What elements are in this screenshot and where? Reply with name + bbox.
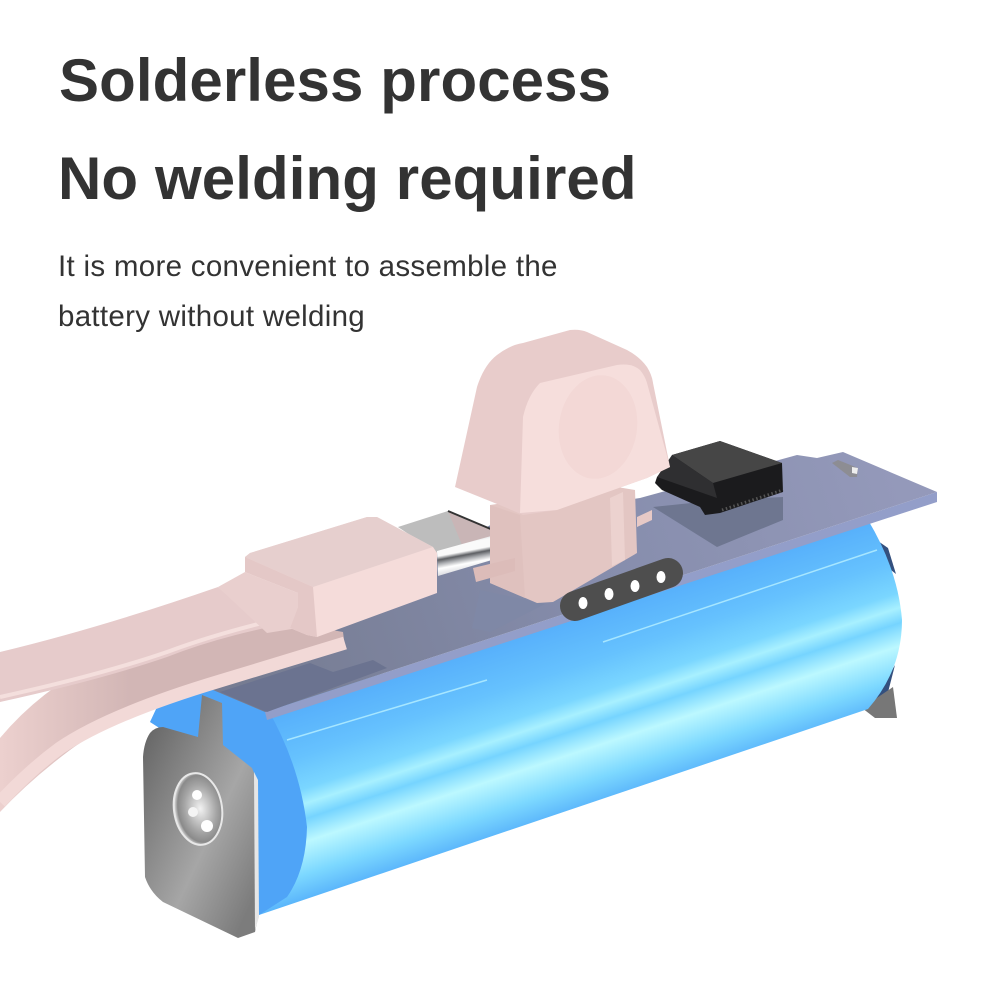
black connector [655,441,783,515]
description line 2: battery without welding [58,300,365,333]
strain relief neck [218,572,305,633]
battery cell [150,520,902,915]
plug housing [245,517,437,637]
description line 1: It is more convenient to assemble the [58,250,558,283]
title line 2: No welding required [58,145,637,212]
upper flat cable [0,587,265,702]
small switch on board [832,460,858,477]
metal contact pins [575,571,668,609]
front metal end plate [143,695,259,938]
lower cable [0,620,345,812]
chrome USB-C plug [398,511,502,576]
rear metal tab [862,541,897,718]
title line 1: Solderless process [59,47,611,114]
pink connector cap [455,330,670,515]
circuit board [213,452,937,720]
pink connector stem [473,487,652,603]
battery end cap [150,688,307,915]
